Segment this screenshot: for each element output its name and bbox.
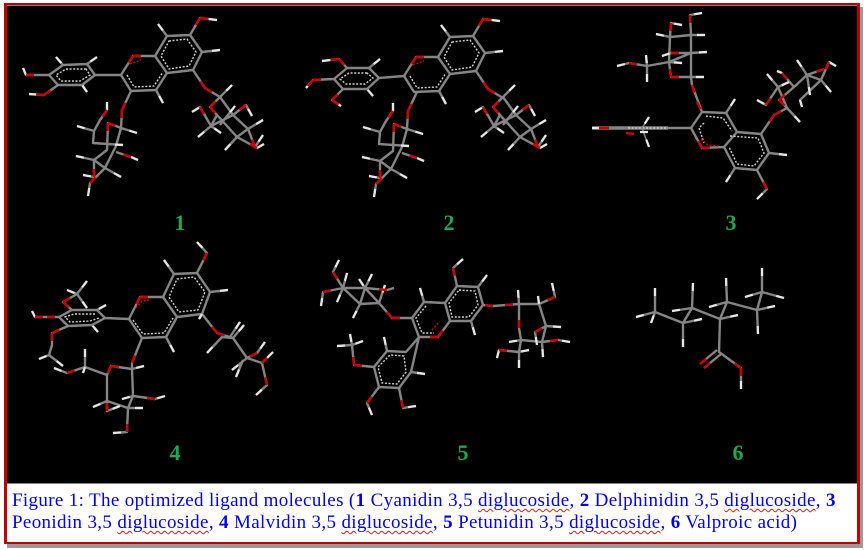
label 2: 2 [444,210,454,235]
caption line 1: Figure 1: The optimized ligand molecules (1 Cyanidin 3,5 diglucoside, 2 Delphinidin 3,5 diglucoside, 3 [12,490,836,511]
caption line 2: Peonidin 3,5 diglucoside, 4 Malvidin 3,5 diglucoside, 5 Petunidin 3,5 diglucoside, 6 Valproic acid) [12,512,797,533]
molecule 3: Peonidin 3,5 diglucoside [592,13,836,199]
label 3: 3 [726,210,736,235]
label 1: 1 [174,210,186,235]
molecule 1: Cyanidin 3,5 diglucoside [23,18,264,196]
label 5: 5 [458,440,468,465]
molecule 4: Malvidin 3,5 diglucoside [32,242,273,433]
molecule 6: Valproic acid [636,268,784,389]
molecule 5: Petunidin 3,5 diglucoside [321,259,570,415]
label 6: 6 [732,440,744,465]
label 4: 4 [170,440,180,465]
molecule 2: Delphinidin 3,5 diglucoside [306,19,547,197]
caption [12,490,836,534]
